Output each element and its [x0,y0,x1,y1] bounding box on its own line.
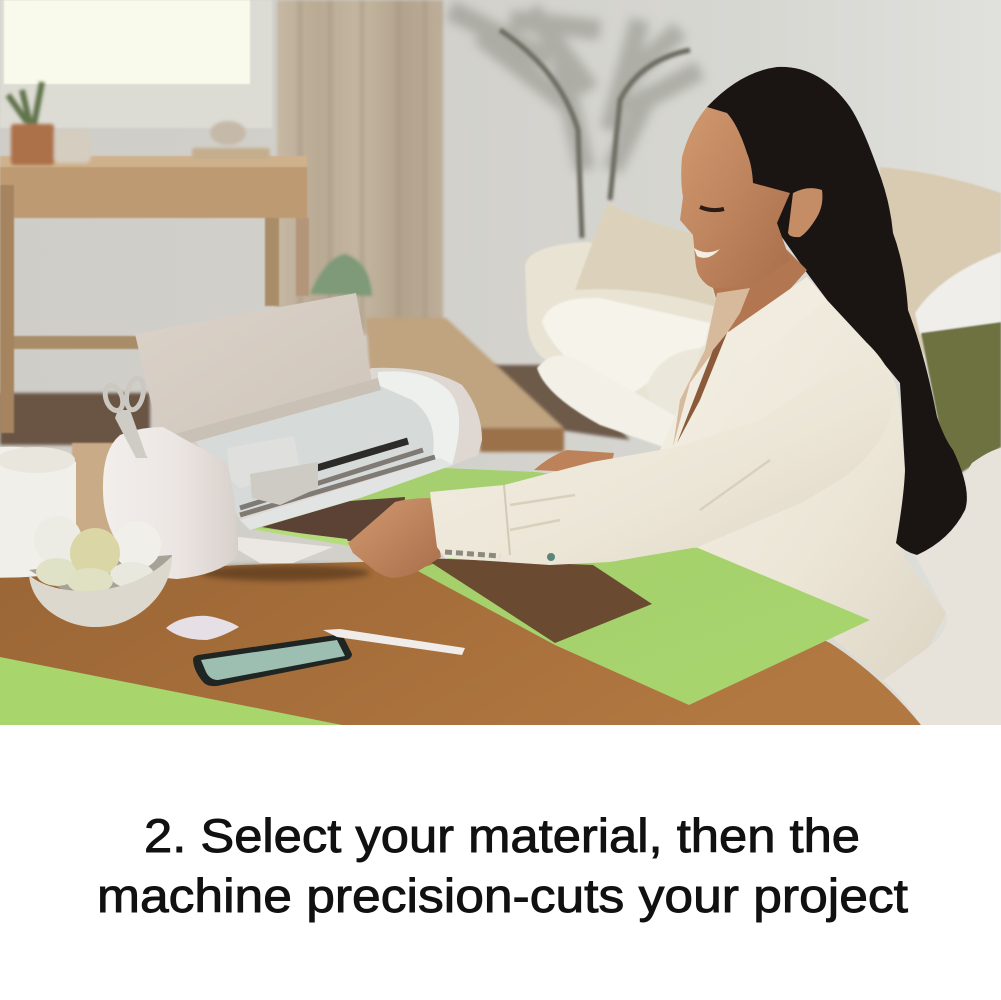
mat at bottom-left [0,657,342,725]
ear [788,188,822,237]
sleeve [430,343,895,565]
blurred tree [450,10,700,238]
side desk [0,156,309,433]
room wall [0,0,1001,725]
machine deck [240,458,453,530]
panel: photograph of crafter using cutting machine [0,0,1001,725]
sofa [525,167,1001,480]
sleeve cuff [445,552,500,556]
wooden runner behind cup [71,442,114,537]
window [0,0,272,128]
lid hinge [175,378,381,445]
machine inner white arch [378,371,459,465]
cutting carriage [227,436,318,505]
hair and ponytail [707,67,967,555]
white mug [0,447,76,578]
coffee table [366,318,564,452]
green cutting mat [250,468,870,705]
sleeve button [547,553,555,561]
woman [348,67,967,578]
smile [694,248,720,258]
machine rails [240,450,435,515]
body shell [195,368,482,520]
scissors [102,391,148,458]
desk decorations [8,82,270,165]
open lid [135,293,372,438]
sofa cushion: pillow [575,203,717,307]
tool cup [103,427,237,579]
neck [713,240,807,340]
machine opening [199,386,434,514]
machine front tray [238,537,333,563]
phone [193,635,352,686]
sofa seat cushion [542,298,710,393]
green throw [921,322,1001,480]
small puck [166,616,239,640]
weeding pen [323,629,465,655]
white pillow [915,252,1001,335]
sofa base [537,356,677,450]
heading line 1: 2. Select your material, then the [144,809,860,862]
near hand [348,498,441,578]
curtain [277,0,443,335]
heading [97,809,908,922]
far hand [534,450,614,472]
sofa far back [880,167,1001,450]
shirt collar [727,277,827,365]
heading line 2: machine precision-cuts your project [97,869,908,922]
sofa small cushion [649,348,698,382]
collar and chest [673,288,750,447]
bowl of balls [29,516,172,627]
torso shirt [660,277,946,680]
plant behind machine [310,254,372,296]
chair [883,448,1001,725]
face [680,107,790,288]
shadow under machine [200,565,370,581]
dining table surface [0,560,921,725]
eyes [700,207,724,210]
cutting machine [102,293,482,579]
floor [0,393,150,445]
sofa frame [525,242,730,455]
